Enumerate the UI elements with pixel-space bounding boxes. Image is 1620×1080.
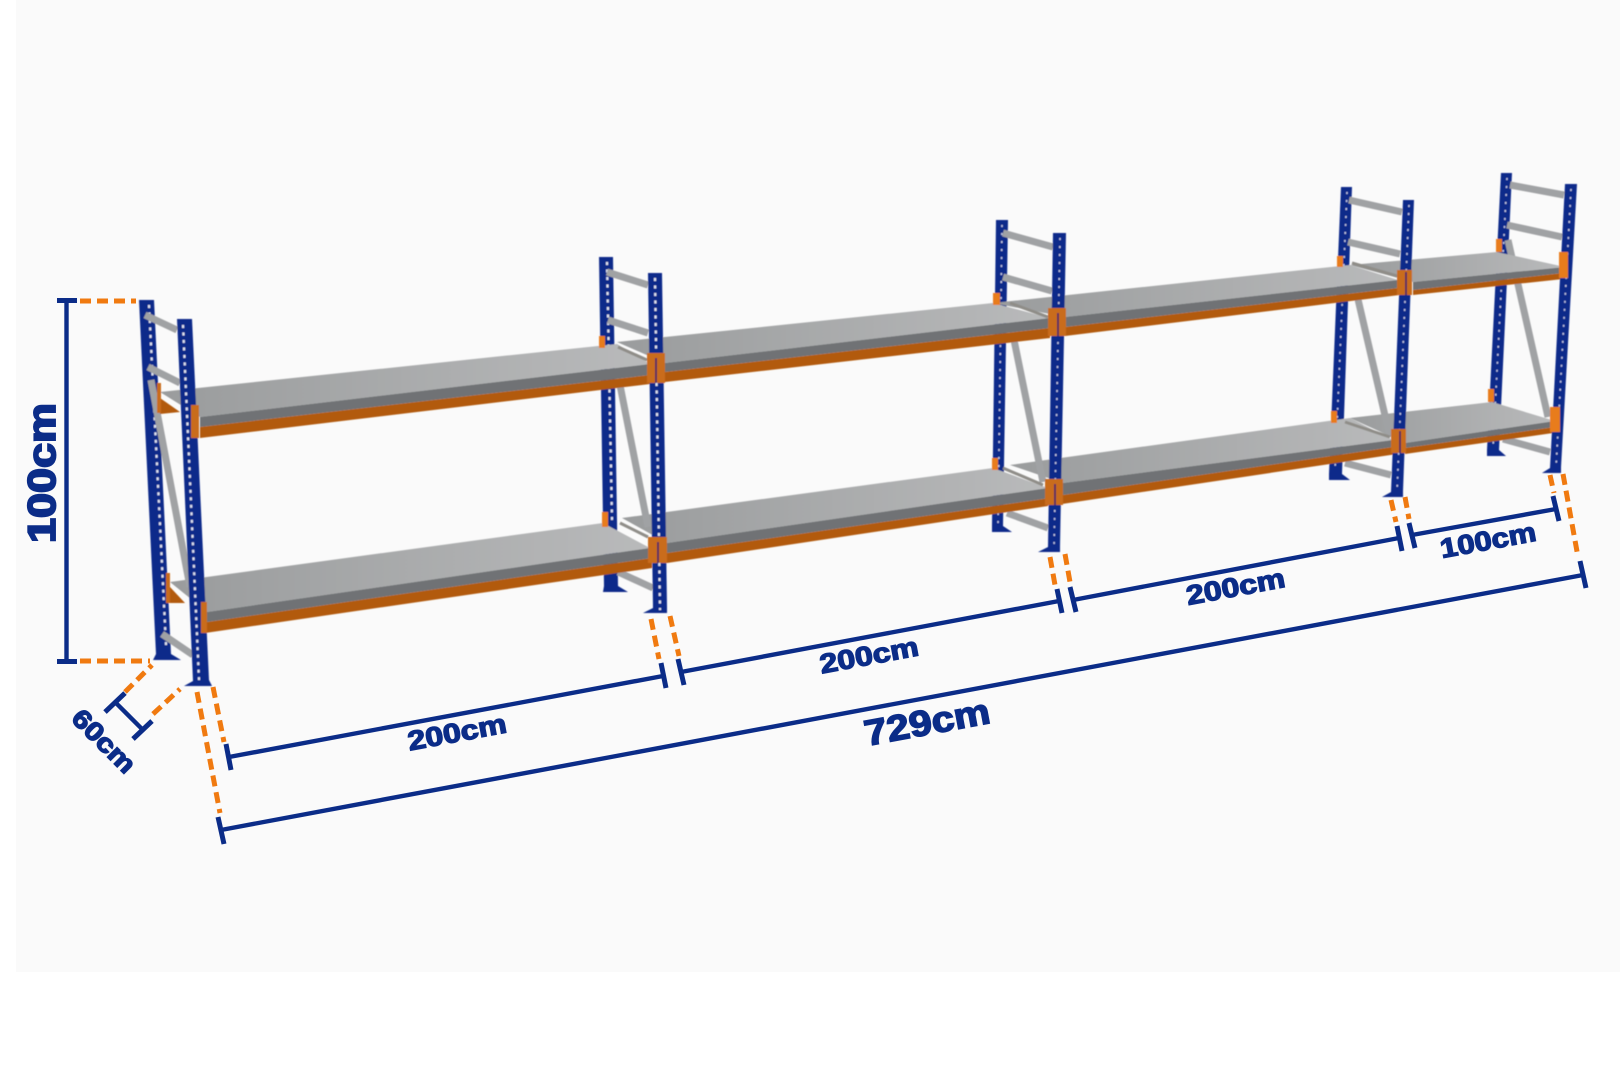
bottom rails (162, 439, 1550, 655)
dimension: total length 729cm: 729cm (861, 690, 993, 754)
dimension: bay 4 100cm: 100cm (1438, 517, 1539, 564)
dimension: bay 1 200cm: 200cm (405, 709, 509, 756)
lower shelf (170, 402, 1555, 633)
dimension: height 100cm: 100cm (21, 403, 64, 543)
orange connectors (157, 239, 1568, 633)
front uprights (177, 184, 1577, 686)
dimension: bay 3 200cm (1065, 500, 1402, 612)
dimension: total length 729cm (197, 474, 1586, 844)
dimension: depth 60cm (66, 665, 180, 779)
illustration: shelving rack (139, 173, 1577, 686)
rear uprights (139, 173, 1512, 660)
dimension: bay 2 200cm (670, 557, 1062, 685)
dimension: bay 1 200cm (213, 619, 666, 770)
dimension: depth 60cm: 60cm (66, 703, 142, 779)
dimension: bay 3 200cm: 200cm (1184, 563, 1287, 611)
upper shelf (160, 252, 1565, 438)
dimension: bay 4 100cm (1405, 475, 1559, 564)
dimension: bay 2 200cm: 200cm (817, 632, 921, 679)
diagonal braces (151, 240, 1548, 587)
upper rails (145, 185, 1564, 383)
